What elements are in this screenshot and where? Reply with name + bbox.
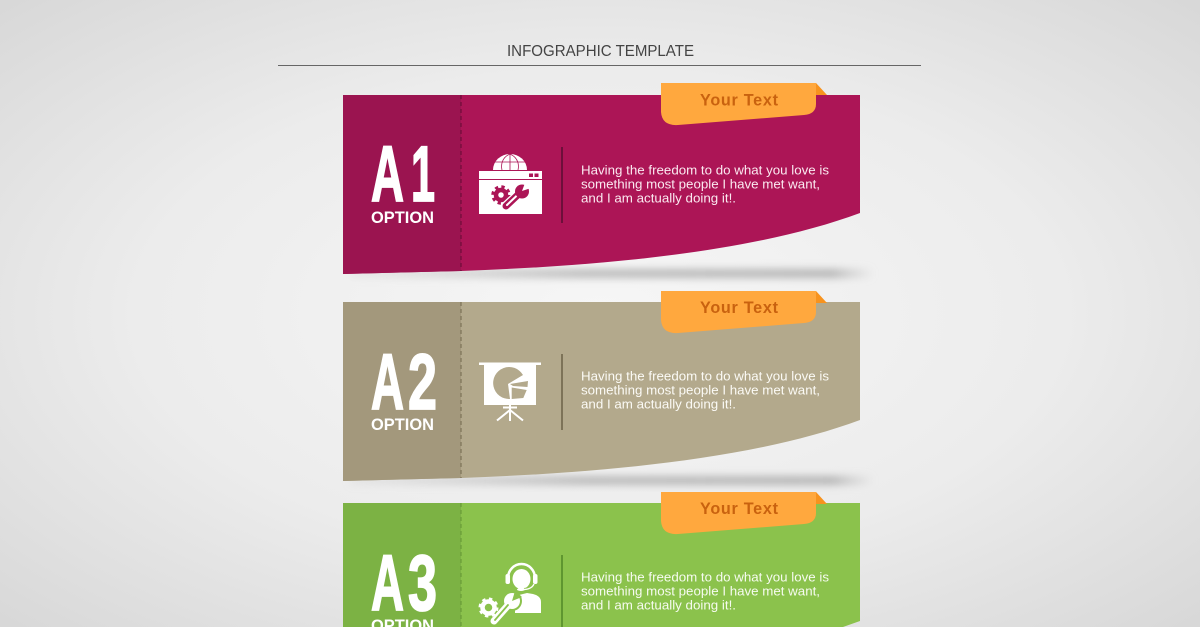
- text: A3 description: [581, 570, 829, 612]
- icon: presentation board: [479, 362, 541, 421]
- label: A3 OPTION: 3: [408, 538, 437, 627]
- label: A2 OPTION: OPTION: [371, 416, 434, 434]
- tab: Your Text: Your Text: [700, 299, 779, 317]
- text: A2 description: Having the freedom to do what you love is: [581, 368, 829, 384]
- panel: A2: [343, 291, 872, 485]
- text: A1 description: [581, 162, 829, 206]
- icon: web settings window: [479, 154, 542, 214]
- label: A3 OPTION: A: [371, 538, 404, 627]
- tab: Your Text: [661, 83, 827, 125]
- tab: Your Text: Your Text: [700, 500, 779, 518]
- label: A1 OPTION: 1: [411, 129, 435, 218]
- panel: A3: [343, 492, 860, 627]
- text: A1 description: and I am actually doing it!.: [581, 190, 736, 206]
- text: A3 description: and I am actually doing it!.: [581, 598, 736, 612]
- title: INFOGRAPHIC TEMPLATE: [507, 43, 694, 60]
- label: A2 OPTION: 2: [408, 337, 437, 426]
- tab: Your Text: Your Text: [700, 92, 779, 110]
- label: A2 OPTION: A: [371, 337, 404, 426]
- text: A2 description: [581, 368, 829, 412]
- text: A2 description: and I am actually doing it!.: [581, 396, 736, 412]
- text: A2 description: something most people I have met want,: [581, 382, 820, 398]
- label: A1 OPTION: A: [371, 129, 404, 218]
- label: A1 OPTION: OPTION: [371, 209, 434, 227]
- text: A1 description: something most people I have met want,: [581, 176, 820, 192]
- icon: support agent with tools: [480, 564, 541, 621]
- text: A1 description: Having the freedom to do what you love is: [581, 162, 829, 178]
- panel: A1: [343, 83, 872, 278]
- text: A3 description: Having the freedom to do what you love is: [581, 570, 829, 584]
- tab: Your Text: [661, 492, 827, 534]
- text: A3 description: something most people I have met want,: [581, 584, 820, 598]
- tab: Your Text: [661, 291, 827, 333]
